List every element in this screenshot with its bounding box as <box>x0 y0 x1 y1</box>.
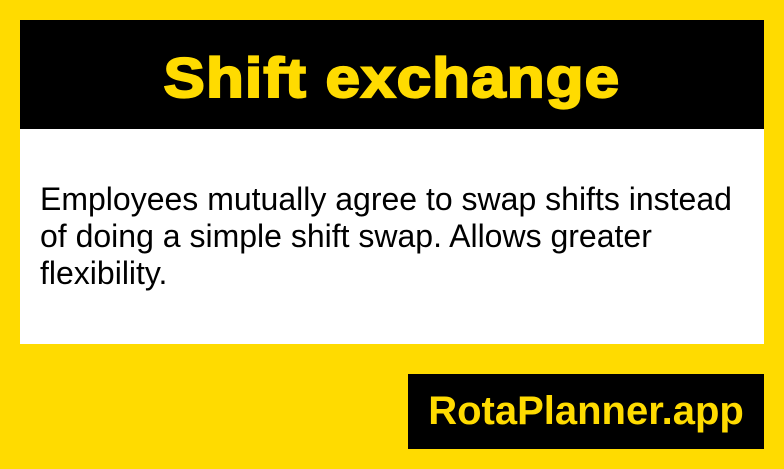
description text: flexibility. <box>40 255 167 291</box>
description text: Employees mutually agree to swap shifts instead <box>40 181 732 217</box>
brand badge <box>408 374 764 449</box>
panel: description <box>20 129 764 344</box>
title: Shift exchange <box>164 46 620 109</box>
title banner <box>20 20 764 129</box>
description text <box>40 181 732 291</box>
brand name: RotaPlanner.app <box>428 389 744 433</box>
description text: of doing a simple shift swap. Allows greater <box>40 218 652 254</box>
